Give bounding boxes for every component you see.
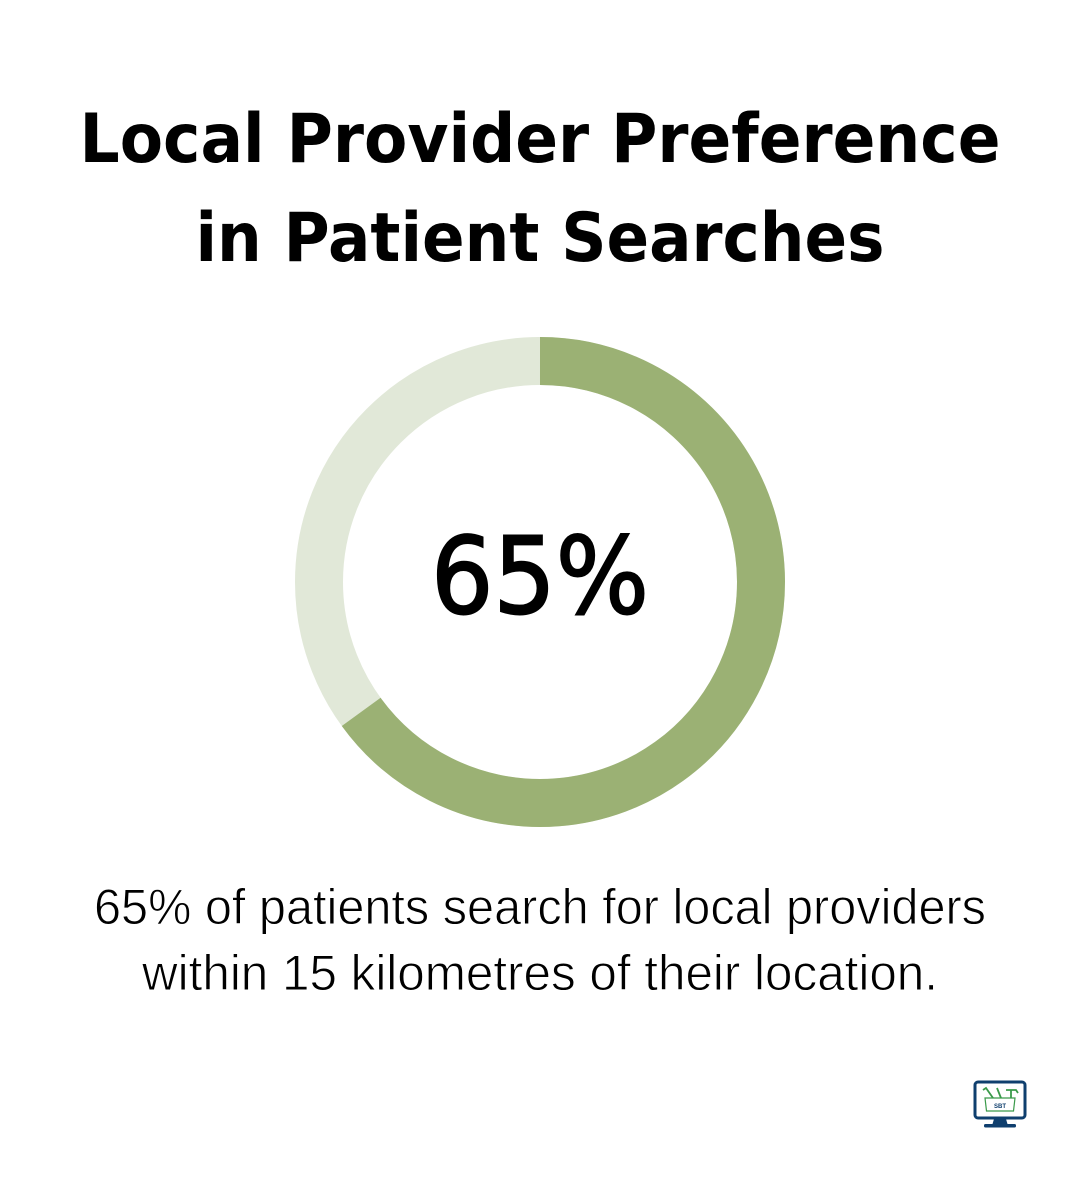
title: Local Provider Preference	[80, 100, 1000, 179]
icon: SBT monitor logo	[975, 1082, 1025, 1128]
title: in Patient Searches	[196, 199, 884, 278]
donut chart: 65%	[319, 361, 761, 803]
icon: SBT monitor logo: SBT	[994, 1104, 1006, 1110]
description text	[94, 879, 986, 1001]
description text: within 15 kilometres of their location.	[141, 945, 938, 1001]
donut value: 65%	[431, 515, 649, 638]
description text: 65% of patients search for local providers	[94, 879, 986, 935]
title	[80, 100, 1000, 278]
